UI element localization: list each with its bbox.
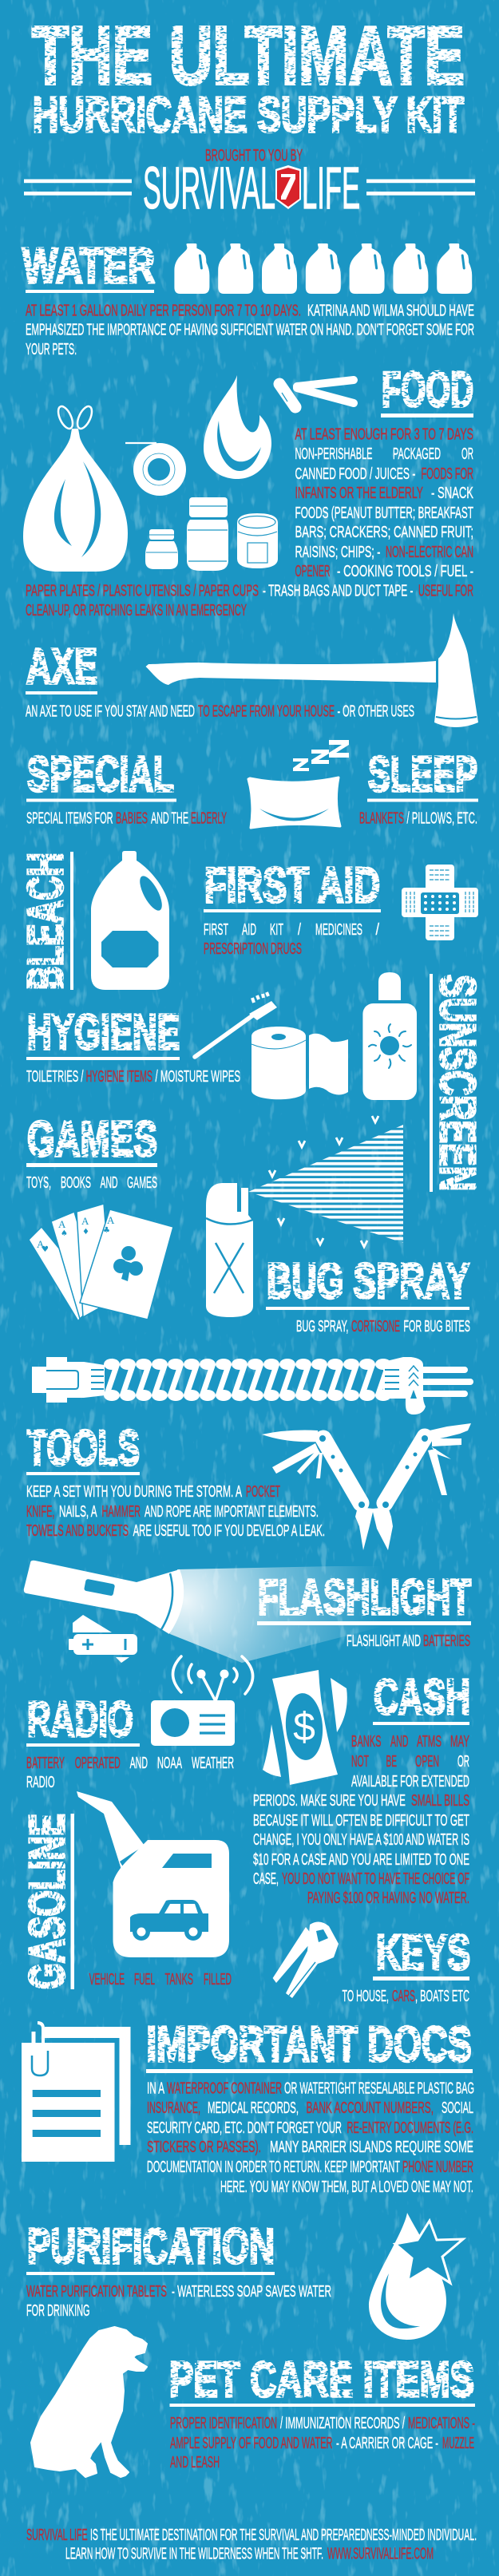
icon: documents — [22, 2023, 131, 2162]
panel: hygiene — [26, 972, 417, 1100]
docs description: SECURITY CARD, ETC. DON'T FORGET YOUR — [147, 2119, 342, 2137]
special description: BABIES — [116, 810, 148, 828]
icon: multitool — [262, 1423, 471, 1550]
icon: keys — [273, 1921, 339, 1998]
gasoline description: VEHICLE — [89, 1971, 125, 1988]
radio description: OPERATED — [75, 1755, 121, 1772]
icon: spray cone — [248, 1125, 403, 1243]
icon: canned food — [237, 513, 278, 568]
pet care description: PROPER IDENTIFICATION — [170, 2415, 277, 2432]
water description: AT LEAST 1 GALLON DAILY PER PERSON FOR 7 TO 10 DAYS. — [26, 302, 301, 319]
first aid description: / — [298, 921, 301, 939]
text: ELDERLY — [191, 810, 227, 828]
heading: games: GAMES — [27, 1112, 157, 1167]
food description: - SNACK — [431, 485, 473, 502]
panel: purification — [26, 2213, 463, 2340]
icon: duct tape — [125, 443, 186, 496]
games description: BOOKS — [61, 1174, 91, 1192]
icon: playing cards: A — [58, 1218, 66, 1230]
panel: axe — [26, 613, 478, 727]
axe description: TO ESCAPE FROM YOUR HOUSE — [198, 703, 335, 721]
special description: SPECIAL ITEMS FOR — [26, 810, 113, 828]
icon: axe — [145, 613, 478, 727]
icon: playing cards: ♥ — [42, 1245, 49, 1254]
first aid description: / — [375, 921, 379, 939]
flashlight beam glow — [170, 1566, 499, 1663]
hygiene description — [26, 1068, 240, 1086]
icon: sunscreen — [362, 972, 417, 1100]
icon: dog — [31, 2327, 147, 2477]
footer: SURVIVAL LIFE — [26, 2527, 88, 2544]
panel: bug spray — [206, 1116, 470, 1335]
icon: bandage — [402, 865, 478, 940]
keys description: CARS — [392, 1988, 415, 2005]
heading: special: SPECIAL — [27, 747, 174, 802]
icon: playing cards: A — [81, 1215, 89, 1227]
tools description — [26, 1483, 325, 1540]
icon: toilet paper — [251, 1027, 348, 1099]
bug spray description: BUG SPRAY, — [296, 1318, 348, 1335]
icon: water jugs — [174, 243, 472, 294]
heading: water: WATER — [22, 239, 155, 294]
first aid description: MEDICINES — [315, 921, 362, 939]
first aid description: FIRST — [204, 921, 228, 939]
panel: important docs — [22, 2017, 474, 2196]
games description: GAMES — [127, 1174, 157, 1192]
icon: zzz — [293, 740, 349, 771]
panel: sunscreen heading — [430, 974, 485, 1192]
panel: gasoline — [20, 1791, 232, 1989]
panel: cash — [253, 1670, 470, 1907]
icon: gas can with car — [77, 1791, 229, 1957]
first aid description: KIT — [270, 921, 283, 939]
panel: bleach — [18, 851, 169, 990]
icon: playing cards: ♦ — [82, 1228, 89, 1237]
cash description: CASE, — [253, 1870, 279, 1888]
docs description: MEDICAL RECORDS, — [208, 2099, 299, 2117]
food description: OPENER — [295, 563, 331, 580]
icon: flying bugs — [269, 1116, 378, 1247]
cash description: BANKS — [351, 1733, 382, 1751]
tools description: HAMMER — [102, 1503, 141, 1521]
radio description: RADIO — [26, 1774, 55, 1791]
heading: purification: PURIFICATION — [27, 2219, 275, 2274]
heading: axe: AXE — [26, 639, 97, 694]
title block — [24, 10, 475, 221]
icon: dollar bill: $ — [293, 1704, 315, 1749]
logo: survival life — [24, 155, 475, 221]
docs description: WATERPROOF CONTAINER — [167, 2080, 282, 2098]
icon: playing cards: A — [37, 1238, 45, 1250]
panel: special — [26, 747, 227, 828]
heading: first aid: FIRST AID — [204, 858, 380, 913]
panel: sunscreen heading: SUNSCREEN — [430, 975, 485, 1191]
bug spray description: CORTISONE — [351, 1318, 400, 1335]
cash description: OPEN — [415, 1753, 439, 1771]
pet care description — [170, 2415, 475, 2471]
special description: AND THE — [151, 810, 188, 828]
tools description: AND ROPE ARE IMPORTANT ELEMENTS. — [145, 1503, 319, 1521]
icon: small jar — [145, 529, 178, 569]
radio description: WEATHER — [192, 1755, 234, 1772]
panel: water — [22, 239, 474, 358]
icon: trash bag — [23, 404, 128, 572]
gasoline description: FUEL — [134, 1971, 155, 1988]
panel: cash: OR — [457, 1753, 469, 1771]
heading: gasoline: GASOLINE — [20, 1814, 75, 1989]
panel: first aid — [204, 858, 478, 958]
docs description: INSURANCE, — [147, 2099, 200, 2117]
axe description: - OR OTHER USES — [337, 703, 414, 721]
hygiene description: TOILETRIES / — [26, 1068, 84, 1086]
food description: RAISINS; CHIPS; - — [295, 544, 380, 561]
gasoline description: TANKS — [164, 1971, 193, 1988]
first aid description: AID — [242, 921, 256, 939]
icon: playing cards — [29, 1204, 173, 1321]
icon: playing cards: ♣ — [103, 1226, 110, 1235]
food description: CLEAN-UP, OR PATCHING LEAKS IN AN EMERGENCY — [26, 602, 247, 619]
gasoline description: FILLED — [204, 1971, 232, 1988]
cash description: AND — [390, 1733, 409, 1751]
icon: radio — [151, 1656, 253, 1746]
pet care description: / IMMUNIZATION RECORDS / — [280, 2415, 405, 2432]
tools description: TOWELS AND BUCKETS — [26, 1522, 129, 1540]
heading: tools: TOOLS — [27, 1421, 140, 1476]
icon: toothbrush — [195, 992, 277, 1057]
panel: food — [23, 362, 473, 619]
icon: batteries — [69, 1615, 137, 1663]
tools description: NAILS, A — [59, 1503, 97, 1521]
keys description: TO HOUSE, — [342, 1988, 389, 2005]
panel: radio — [26, 1656, 253, 1791]
flashlight description: FLASHLIGHT AND — [347, 1632, 421, 1650]
pet care description: AND LEASH — [170, 2454, 220, 2471]
tools description: KNIFE, — [26, 1503, 54, 1521]
food description: PACKAGED — [393, 445, 441, 463]
food description: CANNED FOOD / JUICES - — [295, 465, 415, 483]
water description: YOUR PETS. — [26, 341, 77, 358]
food description — [26, 426, 473, 619]
panel: keys — [273, 1921, 470, 2005]
icon: dollar bill — [263, 1670, 347, 1785]
purification description: WATER PURIFICATION TABLETS — [26, 2283, 167, 2301]
docs description: STICKERS OR PASSES). — [147, 2139, 261, 2156]
tools description: POCKET — [246, 1483, 280, 1501]
icon: can opener — [279, 380, 354, 407]
logo: survival life: SURVIVAL — [143, 155, 275, 221]
purification description: FOR DRINKING — [26, 2302, 89, 2320]
panel: pet care — [31, 2327, 475, 2477]
radio description — [26, 1755, 234, 1791]
purification description — [26, 2283, 331, 2320]
heading: bleach: BLEACH — [18, 853, 73, 990]
logo: survival life: LIFE — [302, 155, 360, 221]
icon: cooking flame — [204, 375, 271, 479]
icon: bleach jug — [91, 851, 169, 990]
purification description: - WATERLESS SOAP SAVES WATER — [172, 2283, 331, 2301]
heading: hygiene: HYGIENE — [27, 1005, 180, 1060]
icon: flashlight — [24, 1561, 184, 1634]
radio description: NOAA — [157, 1755, 182, 1772]
brought to you by: BROUGHT TO YOU BY — [205, 145, 303, 164]
heading: radio: RADIO — [27, 1692, 133, 1747]
footer — [26, 2527, 477, 2563]
icon: paracord bracelet — [32, 1357, 470, 1415]
hygiene description: HYGIENE ITEMS — [86, 1068, 152, 1086]
food description: PAPER PLATES / PLASTIC UTENSILS / PAPER CUPS — [26, 583, 259, 600]
docs description: IN A — [147, 2080, 164, 2098]
icon: spray can — [206, 1183, 253, 1317]
icon: playing cards: ♠ — [61, 1229, 68, 1238]
radio description: AND — [130, 1755, 148, 1772]
axe description: AN AXE TO USE IF YOU STAY AND NEED — [26, 703, 195, 721]
radio description: BATTERY — [26, 1755, 65, 1772]
cash description: MAY — [450, 1733, 469, 1751]
cash description: BE — [386, 1753, 397, 1771]
games description: TOYS, — [26, 1174, 51, 1192]
icon: tall jar — [187, 497, 228, 571]
games description: AND — [101, 1174, 118, 1192]
pet care description: AMPLE SUPPLY OF FOOD AND WATER — [170, 2435, 332, 2452]
panel: flashlight — [24, 1561, 499, 1663]
icon: pillow — [248, 778, 340, 828]
cash description — [253, 1733, 469, 1907]
sleep description: BLANKETS — [359, 810, 404, 828]
food description: NON-PERISHABLE — [295, 445, 372, 463]
text: OR — [461, 445, 473, 463]
games description — [26, 1174, 157, 1192]
gasoline description — [89, 1971, 232, 1988]
first aid description — [204, 921, 379, 958]
hygiene description: / MOISTURE WIPES — [155, 1068, 240, 1086]
cash description: ATMS — [417, 1733, 442, 1751]
docs description — [147, 2080, 474, 2196]
panel: games — [26, 1112, 173, 1321]
icon: water drop with star — [369, 2213, 463, 2340]
icon: playing cards: A — [107, 1214, 115, 1226]
water description — [26, 302, 474, 358]
first aid description: PRESCRIPTION DRUGS — [204, 940, 302, 958]
panel: tools — [26, 1357, 471, 1550]
bug spray description — [296, 1318, 470, 1335]
tools description: ARE USEFUL TOO IF YOU DEVELOP A LEAK. — [133, 1522, 325, 1540]
tools description: KEEP A SET WITH YOU DURING THE STORM. A — [26, 1483, 242, 1501]
cash description: NOT — [351, 1753, 369, 1771]
panel: sleep — [248, 740, 478, 828]
